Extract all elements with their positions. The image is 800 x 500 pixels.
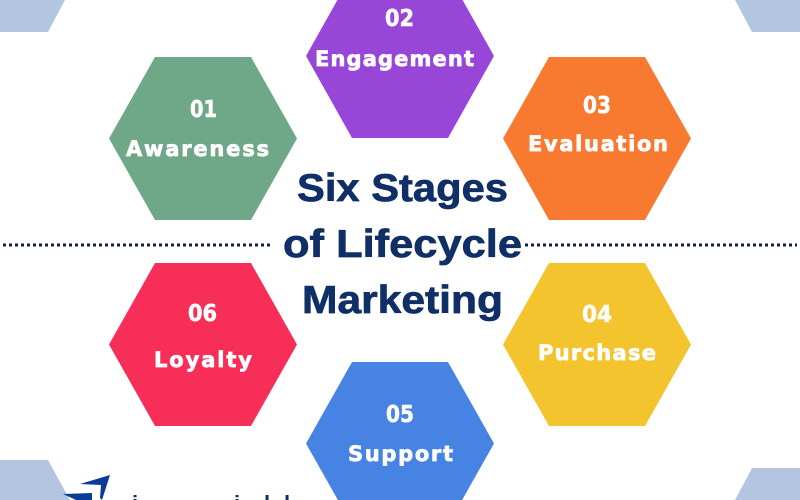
- dotted divider right: [525, 244, 797, 246]
- hexagon 02 Engagement: 02: [385, 6, 414, 32]
- corner shape: top right: [735, 0, 800, 32]
- hexagon 03 Evaluation: Evaluation: [528, 132, 668, 156]
- corner shape: bottom right: [735, 468, 800, 500]
- hexagon 01 Awareness: Awareness: [126, 137, 269, 161]
- hexagon 05 Support: [306, 362, 494, 500]
- logo cropped at bottom edge: [63, 475, 290, 500]
- hexagon 04 Purchase: Purchase: [538, 341, 656, 365]
- hexagon 05 Support: 05: [386, 402, 414, 428]
- hexagon 03 Evaluation: [503, 57, 691, 220]
- title: Marketing: [302, 279, 503, 322]
- hexagon 06 Loyalty: 06: [188, 301, 217, 327]
- hexagon 06 Loyalty: Loyalty: [154, 348, 252, 372]
- hexagon 02 Engagement: Engagement: [315, 47, 474, 71]
- corner shape: top left: [0, 0, 65, 32]
- hexagon 01 Awareness: [109, 57, 297, 220]
- title: Six Stages: [297, 167, 508, 210]
- hexagon 06 Loyalty: [109, 263, 297, 426]
- hexagon 04 Purchase: [503, 263, 691, 426]
- corner shape: bottom left: [0, 460, 70, 500]
- dotted divider left: [3, 244, 273, 246]
- hexagon 05 Support: Support: [348, 442, 453, 466]
- title: of Lifecycle: [283, 223, 522, 266]
- icon: logo arrow upper: [80, 475, 110, 500]
- hexagon 02 Engagement: [306, 0, 494, 138]
- icon: logo arrow lower: [63, 493, 92, 500]
- title: [283, 167, 522, 322]
- hexagon 01 Awareness: 01: [190, 97, 217, 123]
- hexagon 04 Purchase: 04: [582, 302, 612, 328]
- hexagon 03 Evaluation: 03: [583, 93, 611, 119]
